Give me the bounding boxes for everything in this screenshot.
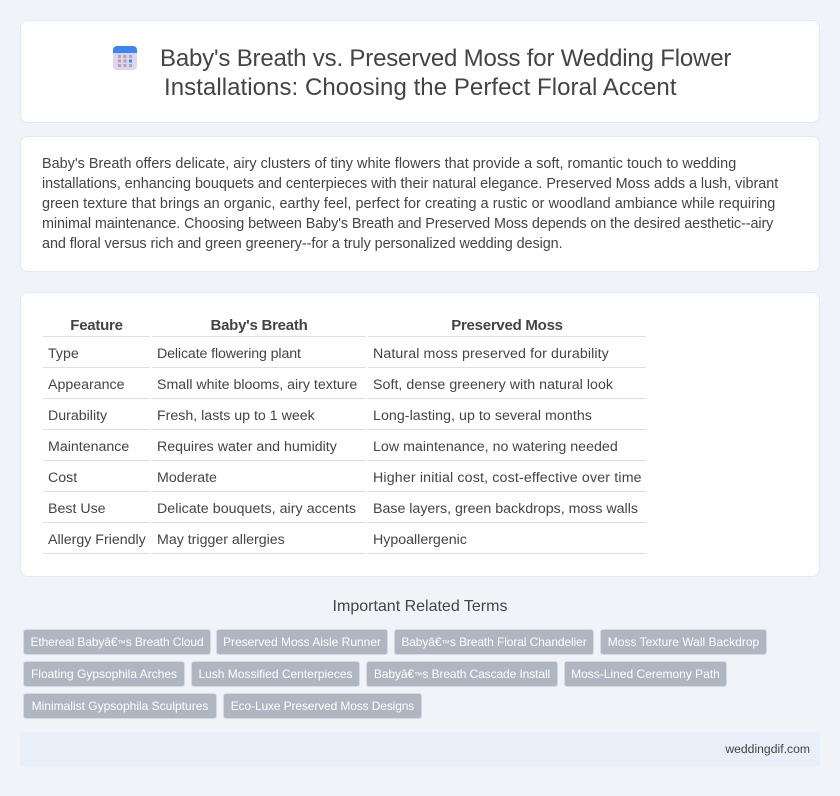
table rows: Base layers, green backdrops, moss walls — [373, 501, 638, 517]
related term tags: Lush Mossified Centerpieces — [198, 667, 353, 681]
related term tags: Babyâ€™s Breath Floral Chandelier — [401, 635, 587, 649]
table rows: Maintenance — [48, 439, 129, 455]
table rows: Low maintenance, no watering needed — [373, 439, 618, 455]
panel: comparison table — [20, 292, 820, 577]
icon: calendar — [113, 46, 137, 70]
heading: important related terms: Important Related Terms — [333, 598, 507, 615]
related term tags: Preserved Moss Aisle Runner — [223, 635, 381, 649]
table header: baby's breath: Baby's Breath — [210, 317, 308, 334]
table rows: Small white blooms, airy texture — [157, 377, 357, 393]
title — [160, 45, 731, 101]
table rows: Requires water and humidity — [157, 439, 337, 455]
table rows: May trigger allergies — [157, 532, 285, 548]
table rows: Cost — [48, 470, 77, 486]
footer source label: weddingdif.com — [725, 742, 810, 756]
description text: and floral versus rich and green greenery--for a truly personalized wedding design. — [42, 236, 563, 252]
table rows: Allergy Friendly — [48, 532, 146, 548]
related term tags: Moss Texture Wall Backdrop — [608, 635, 759, 649]
table rows: Hypoallergenic — [373, 532, 467, 548]
description text: Baby's Breath offers delicate, airy clusters of tiny white flowers that provide a soft, romantic touch to wedding — [42, 156, 736, 172]
related term tags: Ethereal Babyâ€™s Breath Cloud — [30, 635, 204, 649]
related term tags: Babyâ€™s Breath Cascade Install — [374, 667, 550, 681]
related term tags: Moss-Lined Ceremony Path — [571, 667, 720, 681]
description text: installations, enhancing bouquets and centerpieces with their natural elegance. Preserved Moss adds a lush, vibrant — [42, 176, 778, 192]
related term tags — [23, 629, 767, 719]
title: Installations: Choosing the Perfect Floral Accent — [164, 74, 677, 101]
table rows — [43, 336, 646, 554]
table rows: Best Use — [48, 501, 106, 517]
table rows: Long-lasting, up to several months — [373, 408, 592, 424]
description text: minimal maintenance. Choosing between Baby's Breath and Preserved Moss depends on the desired aesthetic--airy — [42, 216, 773, 232]
table rows: Fresh, lasts up to 1 week — [157, 408, 315, 424]
related term tags: Floating Gypsophila Arches — [31, 667, 177, 681]
table header: preserved moss: Preserved Moss — [451, 317, 563, 334]
table header: feature: Feature — [70, 317, 123, 334]
table rows: Moderate — [157, 470, 217, 486]
related term tags: Eco-Luxe Preserved Moss Designs — [231, 699, 414, 713]
table rows: Appearance — [48, 377, 125, 393]
title: Baby's Breath vs. Preserved Moss for Wedding Flower — [160, 45, 731, 72]
table rows: Durability — [48, 408, 107, 424]
table rows: Soft, dense greenery with natural look — [373, 377, 613, 393]
table rows: Delicate bouquets, airy accents — [157, 501, 356, 517]
table rows: Natural moss preserved for durability — [373, 346, 609, 362]
description text: green texture that brings an organic, earthy feel, perfect for creating a rustic or woodland ambiance while requiring — [42, 196, 775, 212]
table rows: Type — [48, 346, 79, 362]
related term tags: Minimalist Gypsophila Sculptures — [32, 699, 208, 713]
panel: header — [20, 20, 820, 123]
table rows: Delicate flowering plant — [157, 346, 301, 362]
description text — [42, 156, 778, 252]
footer — [20, 732, 820, 766]
panel: description — [20, 136, 820, 272]
table rows: Higher initial cost, cost-effective over time — [373, 470, 642, 486]
